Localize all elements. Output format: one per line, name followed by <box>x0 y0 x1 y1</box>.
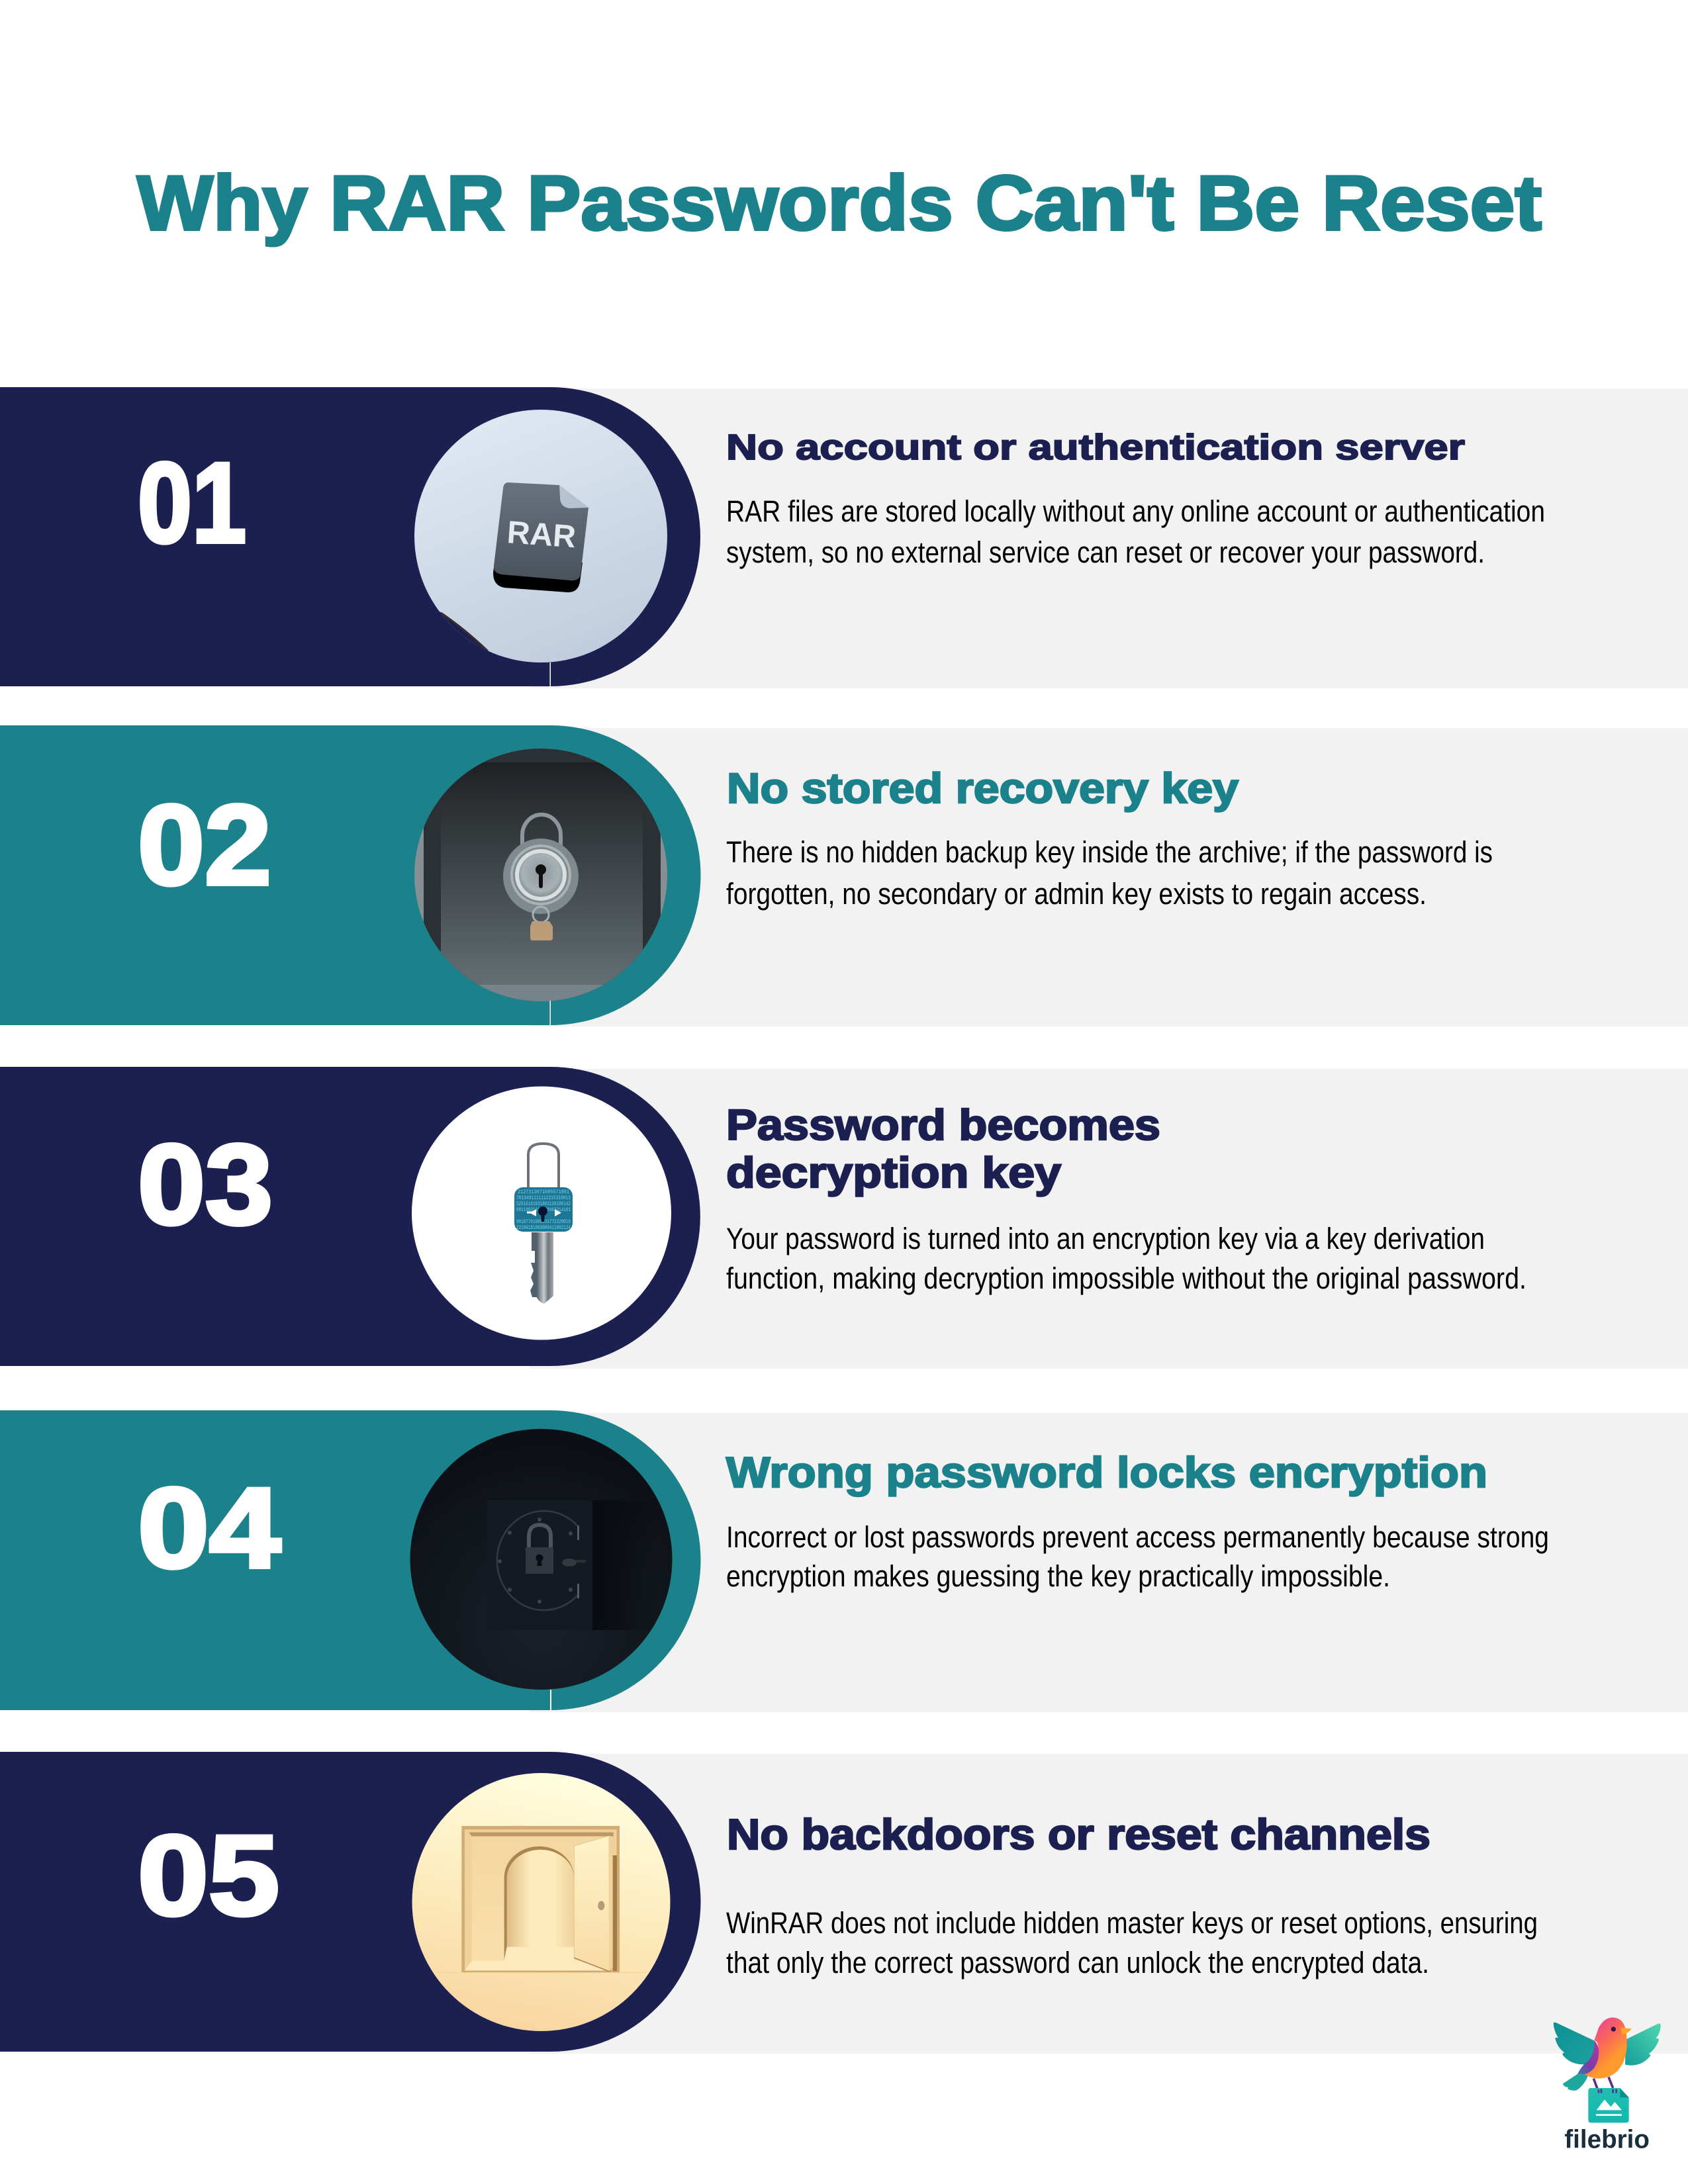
icon: bird body <box>1577 2017 1632 2089</box>
body text 03: function, making decryption impossible without the original password. <box>726 1261 1526 1295</box>
text background 04 <box>530 1413 1688 1712</box>
body text 02 <box>726 835 1493 911</box>
title: Why RAR Passwords Can't Be Reset <box>137 159 1542 246</box>
number tab 04 <box>0 1410 700 1710</box>
number tab 02 <box>0 725 700 1025</box>
body text 02: forgotten, no secondary or admin key exists to regain access. <box>726 877 1427 911</box>
heading 04: Wrong password locks encryption <box>726 1448 1487 1496</box>
body text 02: There is no hidden backup key inside the archive; if the password is <box>726 835 1493 869</box>
heading 03: decryption key <box>726 1148 1061 1197</box>
icon: digital key on white disc: 2127313071095571001 <box>518 1189 569 1195</box>
icon: padlock in vault <box>410 745 675 1006</box>
icon: digital key on white disc: 00110931107178462214101 <box>516 1206 571 1213</box>
body text 04 <box>726 1520 1549 1593</box>
heading 02: No stored recovery key <box>727 764 1239 812</box>
heading 01: No account or authentication server <box>726 428 1465 467</box>
panel: row 03 password becomes key <box>0 1067 1688 1369</box>
number 01: 01 <box>138 439 246 567</box>
text background 02 <box>530 728 1688 1026</box>
icon: digital key on white disc: 7013491111112215310013 <box>516 1195 571 1201</box>
body text 05: that only the correct password can unlock the encrypted data. <box>726 1946 1429 1979</box>
icon: open door and arch <box>412 1773 670 2031</box>
icon: file badge <box>1588 2088 1629 2122</box>
icon: left wing <box>1554 2023 1599 2064</box>
number 05: 05 <box>138 1812 279 1939</box>
heading 03: Password becomes <box>726 1101 1160 1149</box>
icon: right wing <box>1625 2023 1661 2066</box>
panel: row 02 no recovery key <box>0 725 1688 1026</box>
icon: digital key on white disc: 90107701086031772229010 <box>516 1218 571 1225</box>
logo: filebrio bird on file <box>1554 2017 1661 2154</box>
body text 03: Your password is turned into an encryption key via a key derivation <box>726 1222 1485 1255</box>
body text 03 <box>726 1222 1526 1295</box>
heading 05: No backdoors or reset channels <box>727 1810 1430 1858</box>
logo wordmark: filebrio <box>1564 2125 1650 2154</box>
body text 01 <box>726 494 1545 569</box>
body text 04: Incorrect or lost passwords prevent access permanently because strong <box>726 1520 1549 1554</box>
text background 05 <box>530 1754 1688 2054</box>
number 02: 02 <box>138 782 271 909</box>
icon: RAR file on pale disc: RAR <box>506 515 577 555</box>
number 03: 03 <box>138 1121 273 1248</box>
icon: digital key on white disc: 22194181093089411002124 <box>516 1224 571 1231</box>
panel: row 05 no backdoors <box>0 1752 1688 2054</box>
number 04: 04 <box>138 1465 281 1592</box>
panel: row 04 wrong password <box>0 1410 1688 1712</box>
text background 01 <box>530 388 1688 688</box>
number tab 05 <box>0 1752 700 2052</box>
icon: RAR file on pale disc <box>414 410 667 662</box>
body text 01: system, so no external service can reset or recover your password. <box>726 535 1485 569</box>
icon: digital key on white disc: 52516161931803128100142 <box>516 1201 571 1207</box>
icon: digital key on white disc <box>412 1087 671 1340</box>
body text 01: RAR files are stored locally without any online account or authentication <box>726 494 1545 528</box>
heading 03 <box>726 1101 1160 1197</box>
number tab 01 <box>0 387 700 686</box>
icon: dark vault with padlock <box>407 1426 675 1692</box>
text background 03 <box>530 1069 1688 1369</box>
body text 05: WinRAR does not include hidden master keys or reset options, ensuring <box>726 1906 1538 1940</box>
body text 04: encryption makes guessing the key practically impossible. <box>726 1559 1390 1593</box>
number tab 03 <box>0 1067 700 1366</box>
icon: bird tail <box>1563 2073 1588 2091</box>
body text 05 <box>726 1906 1538 1979</box>
panel: row 01 no account <box>0 387 1688 688</box>
